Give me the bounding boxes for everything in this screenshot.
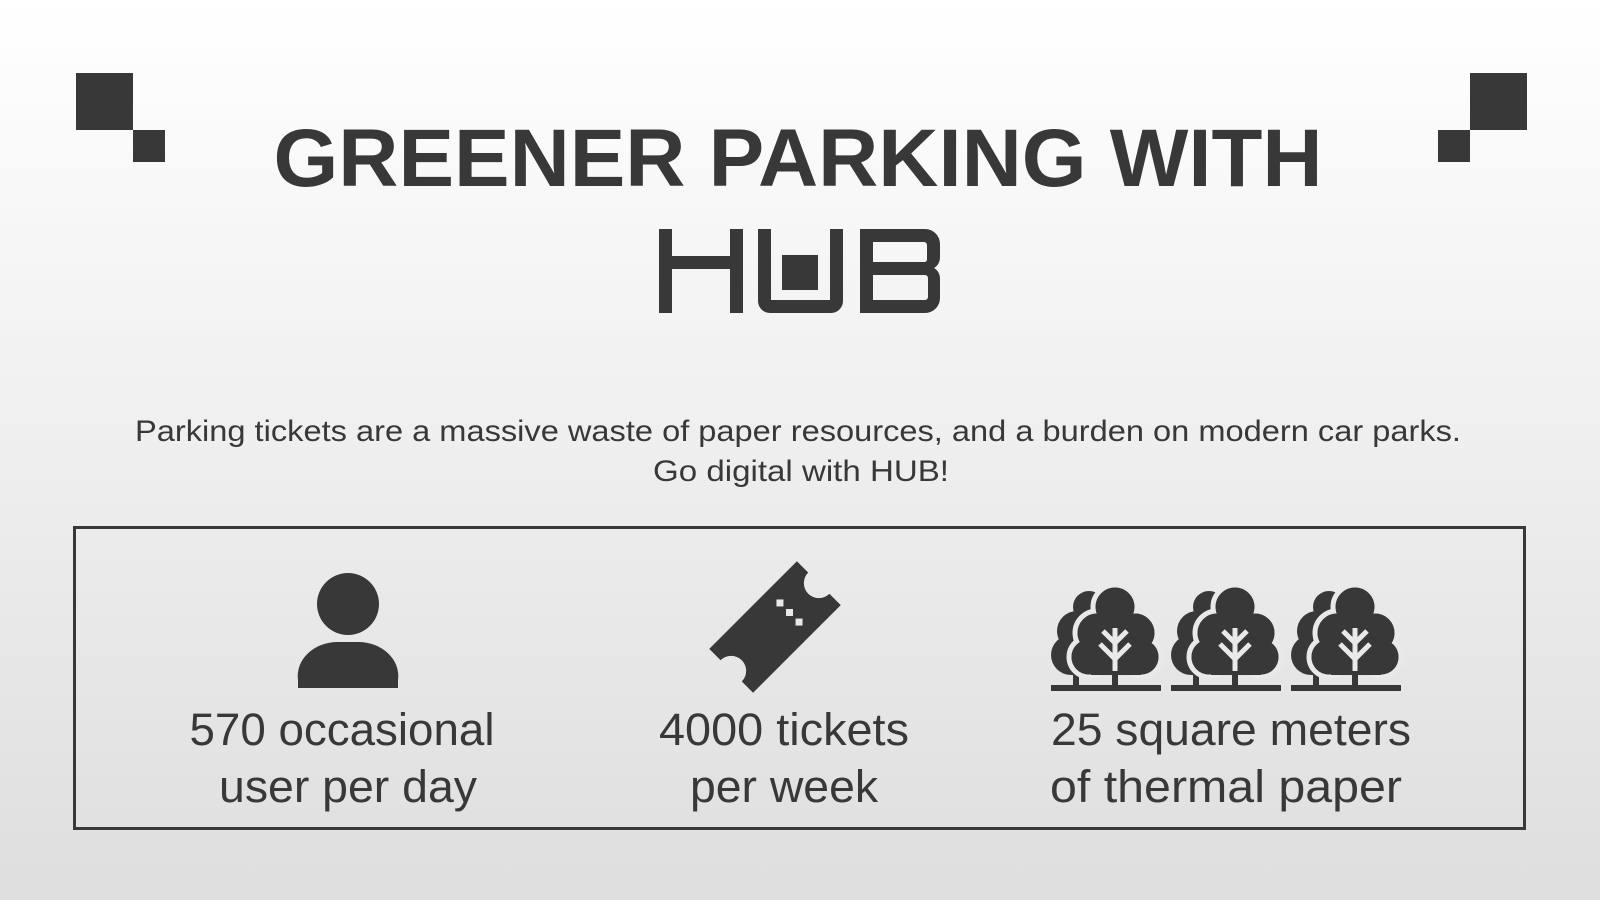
- stat texts: 4000 tickets: [659, 704, 909, 755]
- title: GREENER PARKING WITH: [274, 113, 1322, 204]
- stat texts: 25 square meters: [1051, 704, 1411, 755]
- stat texts: of thermal paper: [1050, 761, 1402, 812]
- corner decoration: top-right squares: [1438, 73, 1527, 162]
- stat texts: per week: [690, 761, 879, 812]
- corner decoration: top-left squares: [76, 73, 165, 162]
- logo: HUB: [659, 229, 940, 313]
- intro text: Go digital with HUB!: [653, 455, 949, 488]
- intro text: [135, 415, 1461, 488]
- icon: ticket: [709, 561, 841, 693]
- stat texts: [190, 704, 1411, 812]
- intro text: Parking tickets are a massive waste of paper resources, and a burden on modern car parks.: [135, 415, 1461, 448]
- stats panel: [74, 528, 1524, 828]
- icon: trees: [1051, 585, 1401, 691]
- stat texts: user per day: [219, 761, 478, 812]
- stat texts: 570 occasional: [190, 704, 494, 755]
- icon: person: [298, 573, 398, 688]
